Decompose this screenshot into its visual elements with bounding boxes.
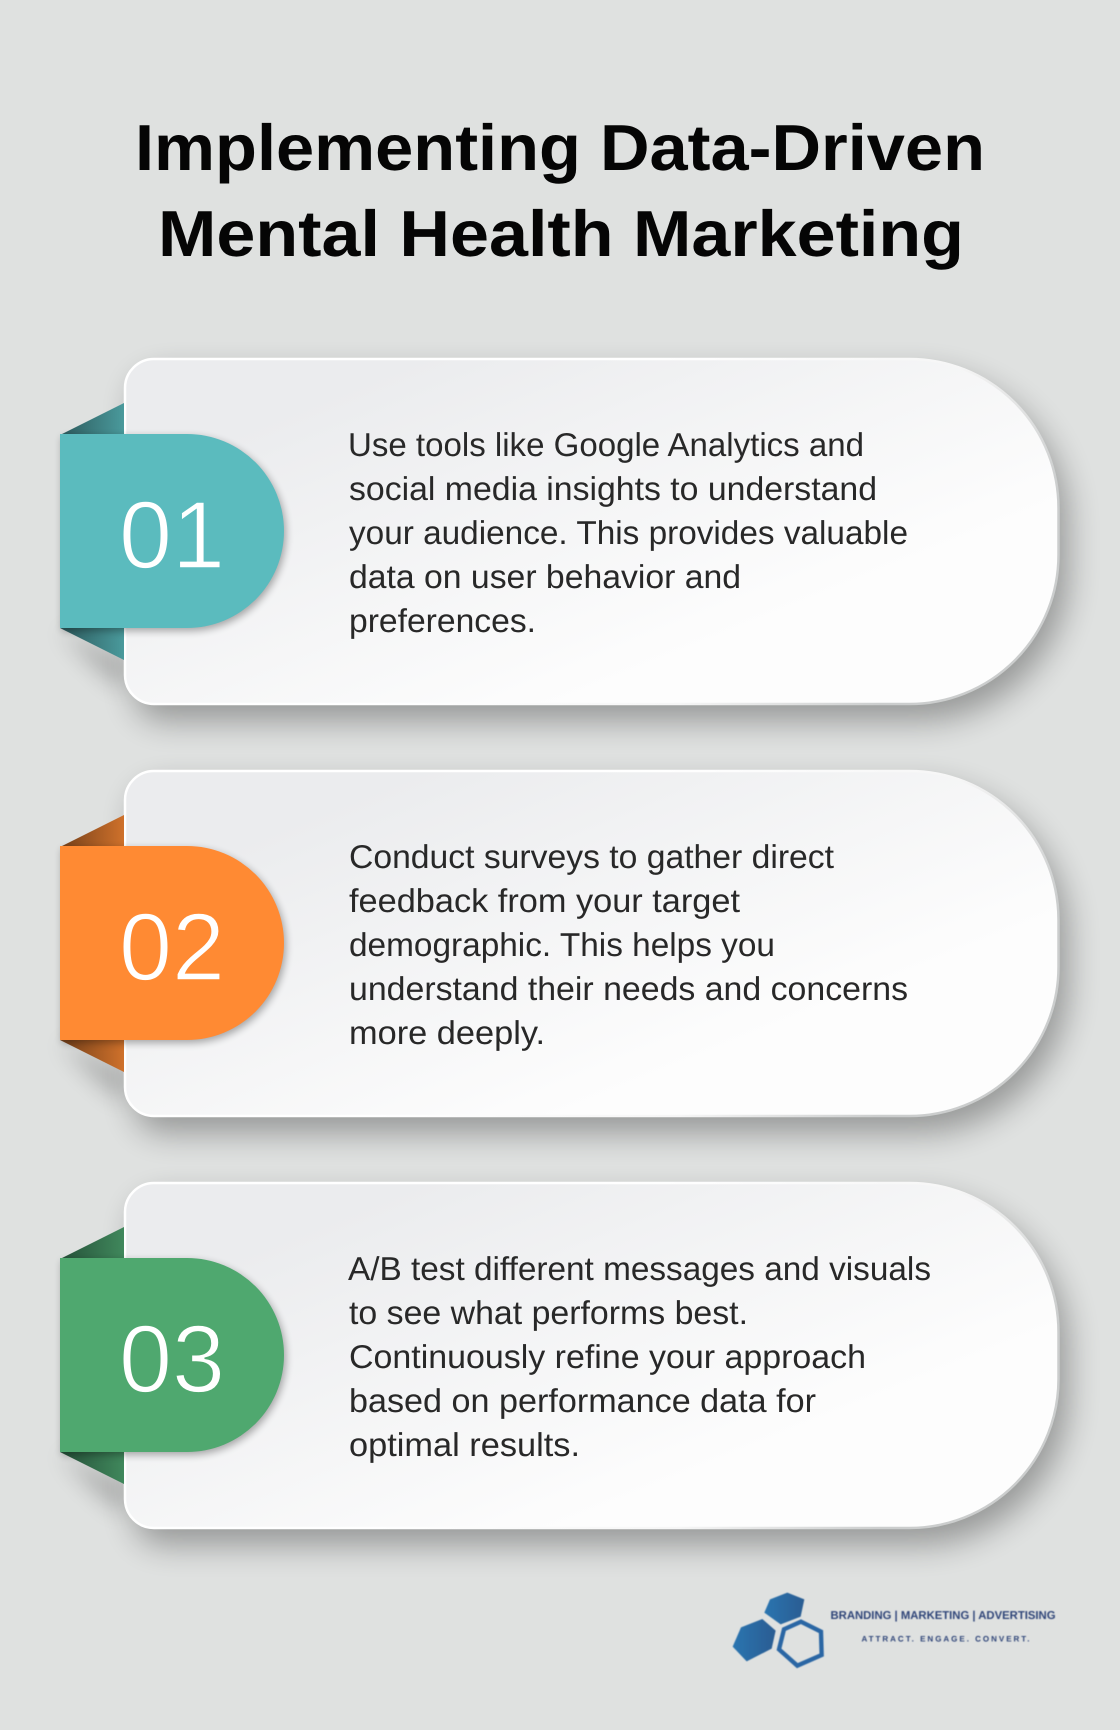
step 01 text bbox=[348, 426, 908, 639]
step 03 text: Continuously refine your approach bbox=[349, 1338, 866, 1375]
icon: hexagons bbox=[733, 1593, 822, 1666]
step 01 text: preferences. bbox=[349, 602, 536, 639]
number tab 02: 02 bbox=[119, 894, 225, 1001]
title bbox=[135, 111, 985, 270]
step 01 text: Use tools like Google Analytics and bbox=[348, 426, 864, 463]
title: Implementing Data-Driven bbox=[135, 111, 985, 184]
logo tagline text bbox=[830, 1610, 1056, 1643]
card bbox=[125, 1183, 1058, 1528]
number tab 03 bbox=[60, 1258, 284, 1452]
number tab 02 bbox=[60, 846, 284, 1040]
number tab 03: 03 bbox=[119, 1306, 225, 1413]
step 02 text bbox=[349, 838, 908, 1051]
panel: step 03 bbox=[60, 1183, 1068, 1545]
logo bbox=[733, 1593, 1056, 1666]
step 03 text: optimal results. bbox=[349, 1426, 580, 1463]
step 01 text: social media insights to understand bbox=[349, 470, 877, 507]
logo tagline text: BRANDING | MARKETING | ADVERTISING bbox=[830, 1610, 1056, 1622]
ribbon folds bbox=[60, 815, 124, 1072]
title: Mental Health Marketing bbox=[158, 197, 964, 270]
step 02 text: demographic. This helps you bbox=[349, 926, 775, 963]
step 02 text: understand their needs and concerns bbox=[349, 970, 908, 1007]
step 02 text: Conduct surveys to gather direct bbox=[349, 838, 834, 875]
step 02 text: feedback from your target bbox=[349, 882, 740, 919]
step 03 text: to see what performs best. bbox=[349, 1294, 748, 1331]
panel: step 01 bbox=[60, 359, 1068, 721]
step 01 text: your audience. This provides valuable bbox=[349, 514, 908, 551]
ribbon folds bbox=[60, 1227, 124, 1484]
panel: step 02 bbox=[60, 771, 1068, 1133]
card bbox=[125, 359, 1058, 704]
ribbon folds bbox=[60, 403, 124, 660]
number tab 01 bbox=[60, 434, 284, 628]
number tab 01: 01 bbox=[119, 482, 225, 589]
step 01 text: data on user behavior and bbox=[349, 558, 741, 595]
card bbox=[125, 771, 1058, 1116]
step 03 text bbox=[348, 1250, 931, 1463]
step 03 text: based on performance data for bbox=[349, 1382, 816, 1419]
step 03 text: A/B test different messages and visuals bbox=[348, 1250, 931, 1287]
step 02 text: more deeply. bbox=[349, 1014, 545, 1051]
logo tagline text: ATTRACT. ENGAGE. CONVERT. bbox=[862, 1634, 1030, 1643]
